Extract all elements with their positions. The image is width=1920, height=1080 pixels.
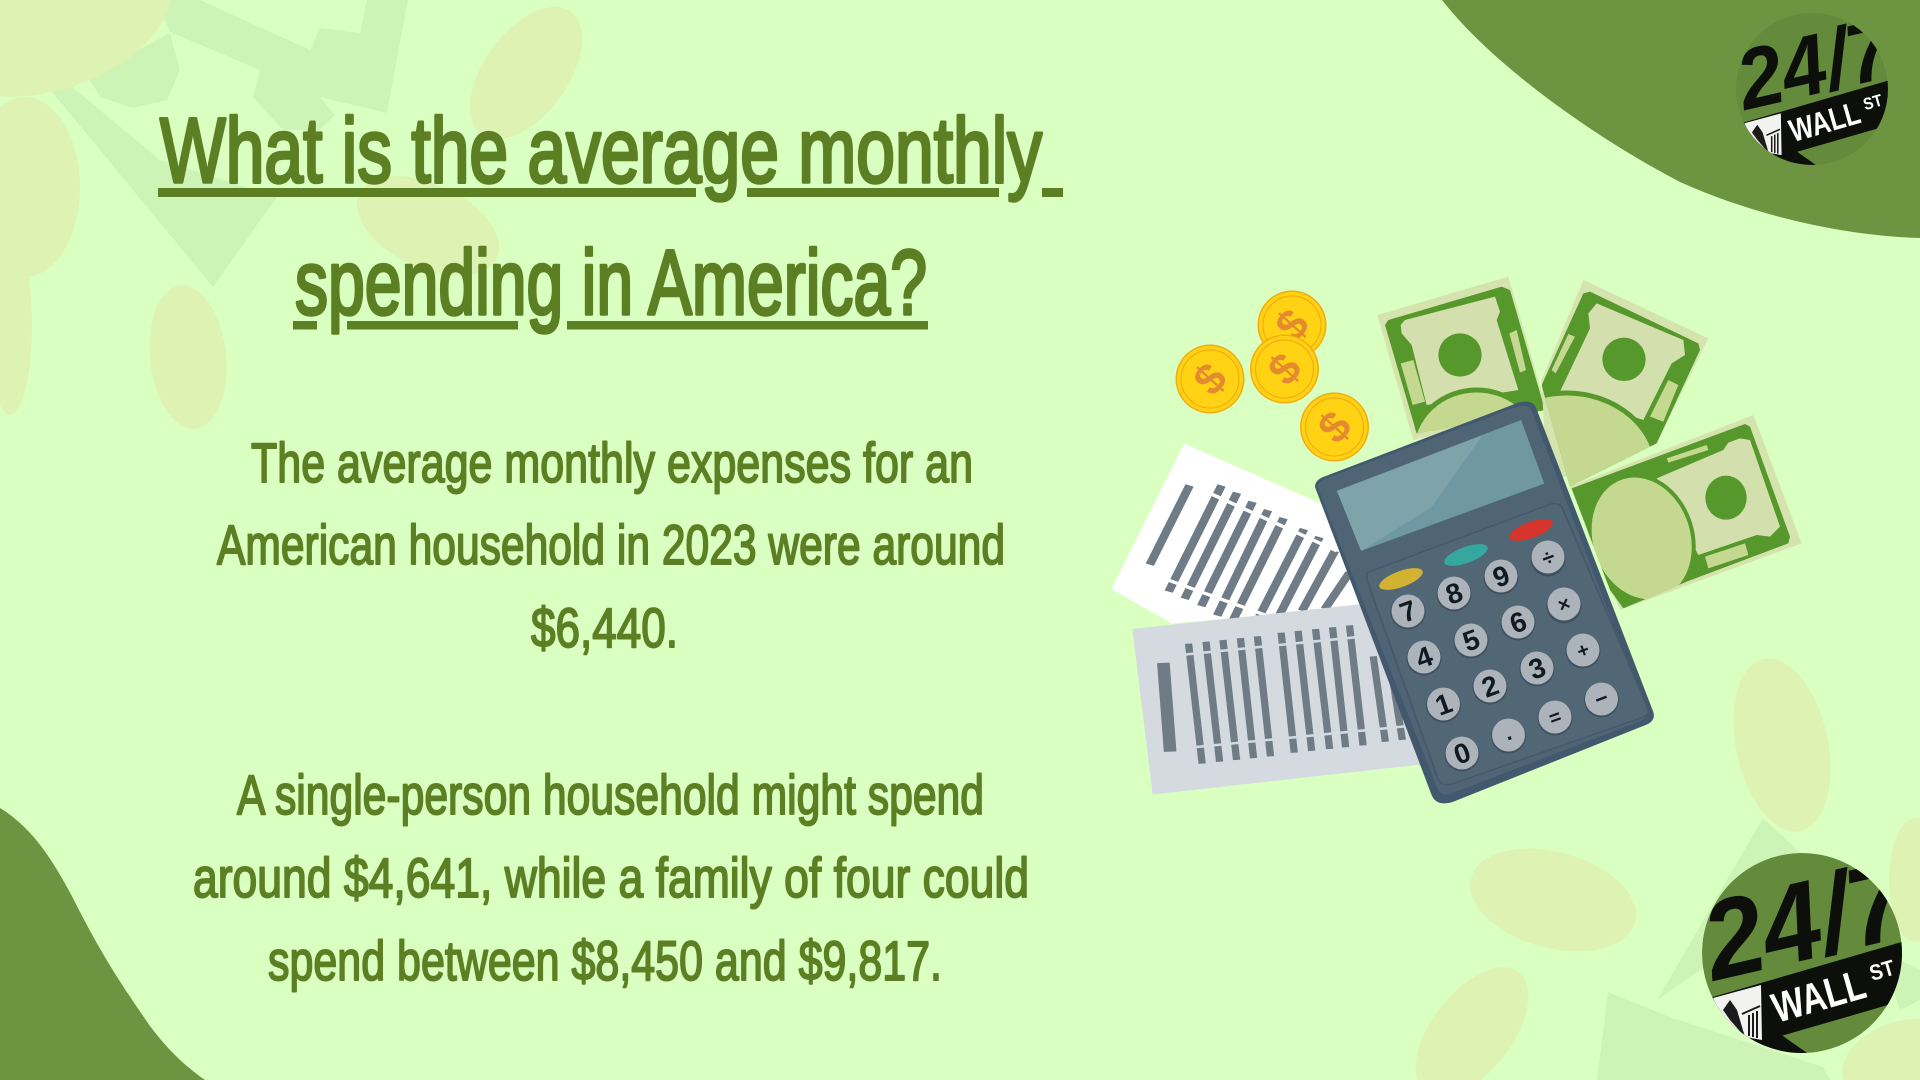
calculator keys: .: [1500, 720, 1515, 745]
illustration: calculator, bills, coins and receipts: [1112, 270, 1802, 803]
calculator function buttons: [1377, 515, 1555, 594]
title underline: [158, 188, 1063, 330]
calculator keys: [1390, 540, 1619, 772]
logo: 24/7 Wall St, top right: [1736, 13, 1888, 165]
calculator keys: +: [1574, 639, 1593, 663]
body text: household size comparison: around $4,641, while a family of four could: [193, 846, 1029, 909]
calculator keys: −: [1591, 685, 1612, 712]
calculator keys: 2: [1478, 669, 1503, 704]
body text: household size comparison: spend between $8,450 and $9,817.: [268, 929, 942, 992]
body text: household size comparison: [193, 763, 1029, 992]
calculator keys: 0: [1450, 736, 1475, 771]
calculator: [1315, 402, 1654, 803]
logo: 24/7 Wall St, top right: WALL: [1785, 94, 1864, 149]
calculator keys: 3: [1525, 651, 1550, 686]
coin 1: $: [1184, 354, 1237, 405]
coin 3: [1250, 334, 1319, 404]
calculator keys: ×: [1555, 593, 1574, 617]
coin 3: $: [1258, 344, 1311, 395]
calculator body: [1315, 402, 1654, 803]
bills: [1370, 270, 1802, 617]
corner blob: top right: [1442, 0, 1920, 238]
calculator keys: 8: [1442, 576, 1467, 611]
bill 3: [1567, 415, 1802, 617]
calculator keys: 4: [1412, 640, 1437, 675]
coin 2: [1258, 290, 1326, 360]
body text: average household: $6,440.: [531, 596, 678, 659]
grey receipt: [1132, 604, 1429, 794]
logo: 24/7 Wall St, bottom right: [1702, 853, 1902, 1053]
coin 4: [1300, 392, 1369, 462]
calculator keys: =: [1546, 706, 1565, 730]
calculator screen: [1337, 420, 1544, 551]
receipts: [1112, 444, 1429, 794]
bill 1: [1378, 276, 1544, 440]
body text: household size comparison: A single-person household might spend: [237, 763, 984, 826]
body text: average household: [217, 431, 1005, 659]
title line 1: What is the average monthly: [160, 100, 1042, 202]
calculator keys: 9: [1489, 559, 1514, 594]
calculator keys: 5: [1459, 623, 1484, 658]
body text: average household: The average monthly expenses for an: [251, 431, 973, 494]
title: [158, 100, 1063, 334]
logo: 24/7 Wall St, bottom right: WALL: [1767, 960, 1871, 1032]
calculator keys: 6: [1506, 605, 1531, 640]
logo: 24/7 Wall St, top right: 24/7: [1726, 0, 1905, 129]
coin 4: $: [1308, 402, 1361, 453]
bill 2: [1542, 280, 1708, 486]
coin 2: $: [1266, 300, 1319, 351]
logo: 24/7 Wall St, bottom right: ST: [1866, 955, 1898, 986]
logo: 24/7 Wall St, top right: ST: [1861, 90, 1885, 114]
body text: average household: American household in 2023 were around: [217, 513, 1005, 576]
corner blob: bottom left: [0, 808, 205, 1080]
title line 2: spending in America?: [295, 232, 927, 334]
calculator keypad panel: [1367, 504, 1648, 785]
calculator keys: ÷: [1538, 544, 1558, 571]
coin 1: [1176, 344, 1244, 414]
calculator keys: 7: [1396, 594, 1421, 629]
white receipt: [1112, 444, 1366, 624]
calculator keys: 1: [1431, 687, 1456, 722]
